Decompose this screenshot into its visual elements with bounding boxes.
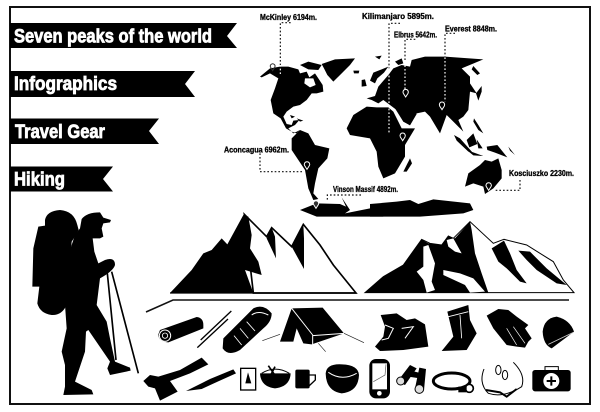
peak labels: Aconcagua 6962m. bbox=[224, 146, 289, 154]
antarctica east bbox=[370, 199, 473, 217]
location pins bbox=[270, 64, 491, 208]
peak labels: Vinson Massif 4892m. bbox=[333, 185, 398, 194]
madagascar bbox=[403, 158, 412, 172]
icon: sleeping mat bbox=[158, 317, 203, 342]
icon: socks bbox=[442, 305, 477, 351]
banner: infographics: Infographics bbox=[14, 74, 117, 95]
banner: hiking bbox=[10, 166, 113, 192]
icon: map card bbox=[241, 368, 256, 390]
icon: trekking sticks bbox=[197, 311, 231, 348]
world map bbox=[260, 56, 515, 217]
hudson bay bbox=[304, 78, 316, 87]
icon: bowl bbox=[326, 364, 359, 393]
mountain left bbox=[170, 214, 356, 293]
japan and pacific islands bbox=[454, 66, 515, 157]
peak labels: Kosciuszko 2230m. bbox=[509, 169, 574, 178]
icon: knife bbox=[186, 369, 236, 391]
africa bbox=[347, 107, 415, 178]
divider line bbox=[146, 300, 569, 312]
banner: hiking: Hiking bbox=[14, 170, 65, 190]
icon: hiking boots bbox=[375, 313, 428, 351]
western hemisphere bbox=[260, 58, 415, 200]
icon: gloves bbox=[487, 309, 532, 348]
australia bbox=[465, 158, 502, 194]
icon: tent bbox=[262, 308, 364, 352]
icon: bowl with fork bbox=[260, 366, 291, 388]
peak labels: Everest 8848m. bbox=[445, 24, 497, 34]
banner: travel gear bbox=[10, 118, 159, 144]
icon: glasses and earplugs bbox=[482, 362, 523, 397]
north america bbox=[260, 67, 323, 133]
eurasia bbox=[367, 57, 483, 133]
icon: axe bbox=[143, 358, 208, 401]
peak labels: Kilimanjaro 5895m. bbox=[362, 12, 434, 21]
icon: headlamp bbox=[433, 373, 473, 392]
banner: travel gear: Travel Gear bbox=[15, 122, 106, 143]
eastern hemisphere bbox=[362, 56, 515, 217]
icon: gps device bbox=[369, 359, 390, 398]
icon: mug bbox=[295, 370, 315, 388]
icon: beanie bbox=[543, 317, 574, 348]
scandinavia and uk bbox=[362, 56, 403, 87]
south america bbox=[292, 130, 329, 200]
hiker silhouette bbox=[32, 210, 138, 395]
arctic islands and greenland bbox=[300, 58, 359, 82]
antarctica west bbox=[300, 197, 383, 217]
peak labels: McKinley 6194m. bbox=[260, 13, 317, 22]
mountain right bbox=[365, 222, 574, 293]
dotted leader lines bbox=[260, 23, 520, 202]
banner: infographics bbox=[10, 71, 195, 97]
icon: first aid kit bbox=[532, 367, 571, 391]
icon: binoculars bbox=[397, 365, 426, 393]
caribbean bbox=[290, 115, 303, 122]
peak labels: Elbrus 5642m. bbox=[394, 30, 437, 40]
icon: sleeping bag bbox=[223, 307, 272, 353]
banner: seven peaks: Seven peaks of the world bbox=[14, 26, 212, 48]
banners bbox=[10, 23, 237, 192]
gear row: camp items bbox=[143, 307, 364, 401]
peak labels bbox=[224, 12, 574, 194]
arabian sea fill: arabia bbox=[395, 108, 417, 125]
gear row: clothing and devices bbox=[369, 305, 574, 398]
